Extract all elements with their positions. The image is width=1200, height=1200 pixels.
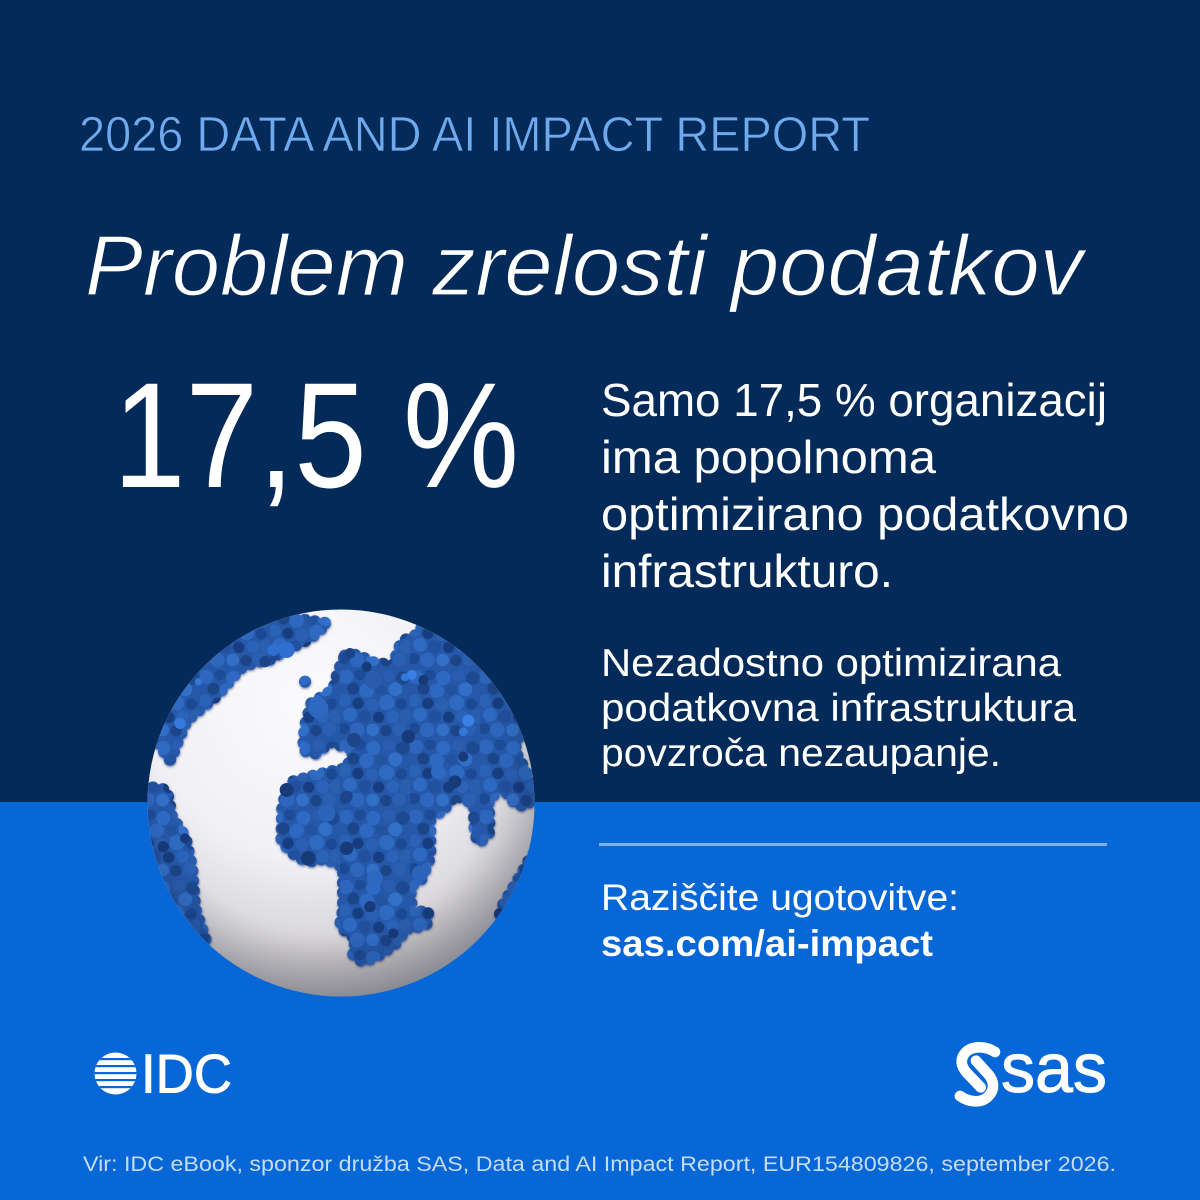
divider: [599, 843, 1107, 846]
statistic description: optimizirano podatkovno: [601, 488, 1129, 540]
call to action: Raziščite ugotovitve:: [601, 877, 959, 918]
supporting text: podatkovna infrastruktura: [601, 687, 1077, 730]
land: island: [299, 676, 311, 688]
call to action: sas.com/ai-impact: [601, 923, 933, 964]
globe illustration: [148, 610, 534, 996]
IDC logo mark: [94, 1052, 136, 1094]
SAS wordmark: sas: [1001, 1029, 1107, 1107]
SAS logo: [960, 1029, 1107, 1107]
land: South America: [148, 782, 214, 946]
statistic description: infrastrukturo.: [601, 545, 893, 597]
statistic description: Samo 17,5 % organizacij: [601, 374, 1107, 426]
land: Australia edge: [493, 850, 529, 920]
highlighted discs: [158, 642, 474, 938]
report label: 2026 DATA AND AI IMPACT REPORT: [79, 108, 870, 162]
IDC wordmark: IDC: [141, 1042, 232, 1104]
land: Europe, Asia, Africa: [282, 617, 563, 962]
land: North America and Greenland: [123, 593, 327, 760]
source footnote: Vir: IDC eBook, sponzor družba SAS, Data and AI Impact Report, EUR154809826, september 2026.: [83, 1152, 1116, 1176]
SAS logo mark: [960, 1047, 995, 1101]
call to action: [601, 877, 959, 964]
background: navy upper band: [0, 0, 1200, 802]
statistic description: ima popolnoma: [601, 431, 936, 483]
statistic description: [601, 374, 1129, 597]
supporting text: povzroča nezaupanje.: [601, 732, 1001, 775]
supporting text: Nezadostno optimizirana: [601, 642, 1062, 685]
big statistic: 17,5 %: [113, 351, 519, 519]
title: Problem zrelosti podatkov: [85, 219, 1088, 314]
IDC logo: [94, 1052, 231, 1094]
background: blue lower band: [0, 802, 1200, 1200]
supporting text: [601, 642, 1077, 775]
